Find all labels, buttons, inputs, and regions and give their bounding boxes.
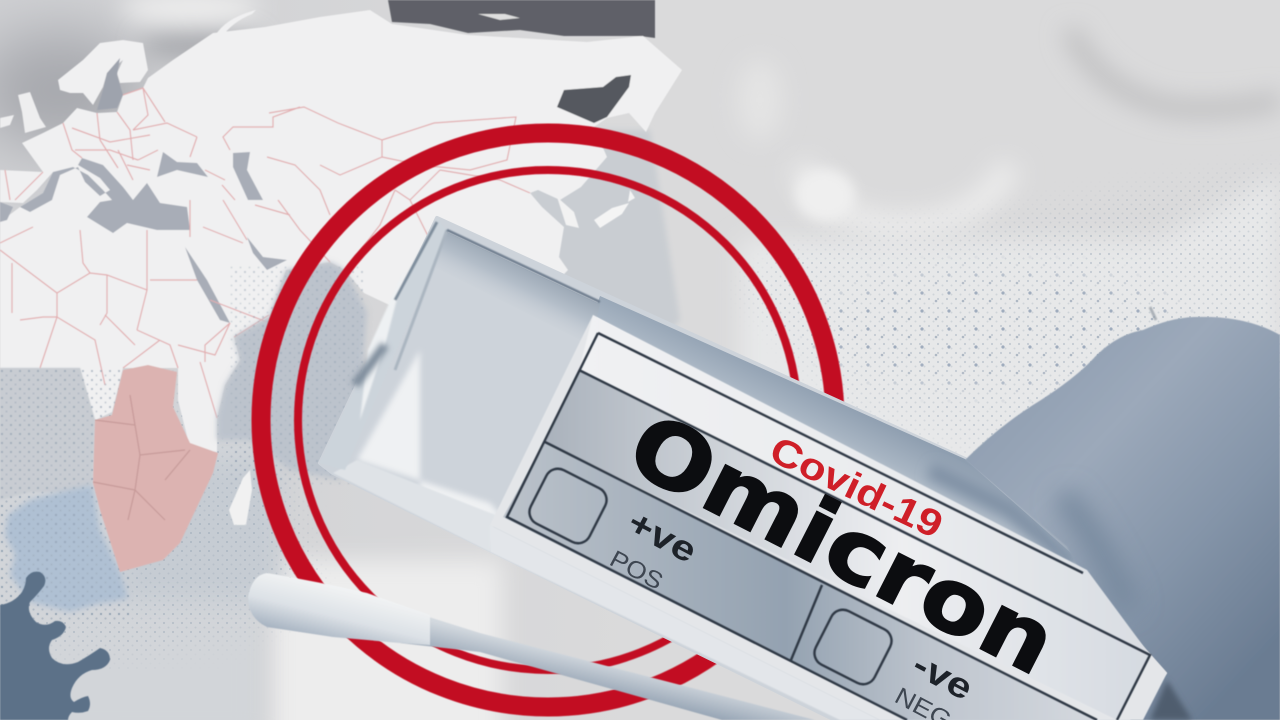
tube: shadow beside glove (930, 470, 1075, 565)
tube: interior dark band (430, 232, 600, 345)
map: novaya zemlya (215, 10, 256, 38)
map: southern africa highlighted (93, 365, 218, 572)
map: japan (594, 190, 635, 228)
tube: top edge line (447, 230, 600, 302)
test tube (320, 218, 1180, 720)
swab: shaft (400, 608, 815, 720)
tube: glass body (320, 218, 1180, 720)
map: atlantic (0, 368, 95, 500)
label: positive text: +ve (621, 503, 703, 571)
tube: light wedge (357, 350, 505, 520)
label: printed frame (507, 333, 1150, 720)
map: southern africa borders (93, 395, 190, 520)
map: okhotsk dark sea (557, 75, 631, 123)
tube: lower edge strip (333, 460, 495, 552)
ring: inner (298, 170, 798, 670)
map: blue ocean patch (5, 485, 128, 612)
map: seas (0, 58, 287, 323)
label: POS text: POS (605, 545, 667, 596)
map: arabian sea and indian ocean (217, 262, 367, 480)
map: korea (557, 197, 579, 228)
map: britain (0, 92, 46, 133)
glove: shadow by label (1150, 680, 1192, 720)
world map (0, 0, 682, 620)
label: negative text: -ve (906, 645, 979, 708)
cotton swab (248, 573, 815, 720)
map: madagascar (229, 470, 252, 525)
tube: open rim (320, 218, 447, 470)
ring: outer (261, 133, 835, 707)
swab: cotton head (248, 573, 430, 645)
map: scandinavia (58, 40, 148, 105)
glove: finger shadow (1062, 495, 1130, 610)
label: Covid-19 text: Covid-19 (763, 429, 949, 547)
label: Omicron text: Omicron (612, 393, 1073, 695)
map: dark arctic sea (388, 0, 655, 38)
map: eurasia and north africa land (0, 10, 682, 452)
map: country borders (0, 88, 530, 418)
tube: upper shadow band (593, 296, 1090, 583)
icon: virus (0, 572, 110, 720)
label: paper (490, 315, 1167, 720)
red target rings (261, 133, 835, 707)
glove (965, 317, 1280, 720)
test label (490, 315, 1167, 720)
